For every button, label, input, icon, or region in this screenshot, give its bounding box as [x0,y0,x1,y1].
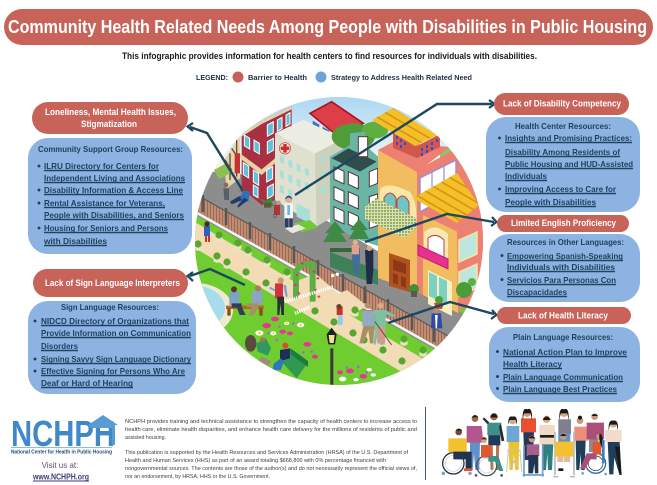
standing person: red top [521,409,536,460]
legend: Barrier to Health [248,73,307,82]
panel: sign language resources: NIDCD Directory of Organizations that [41,317,189,326]
about text: Health and Human Services (HHS) as part of an award totaling $668,800 with 0% percentage financed with [125,458,386,464]
panel: community support group resources: Rental Assistance for Veterans, [44,199,165,208]
couple with child in photo [352,240,373,284]
orange and salmon buildings [330,108,490,316]
standing person: teal top [483,413,504,470]
panel: resources in other languages: Empowering Spanish-Speaking [507,252,623,261]
resident seated on ground [223,183,250,208]
standing person with prosthetic [605,420,622,475]
about text: health care, eliminate health disparities, and enhance health care delivery for the millions of residents of public and [125,427,417,433]
illustration: group of people with disabilities [442,409,622,477]
arrow: loneliness barrier [188,123,243,191]
panel: disability competency barrier: Lack of Disability Competency [503,98,622,108]
panel: resources in other languages: Discapacidades [507,288,567,297]
panel: resources in other languages: Individuals with Disabilities [507,263,615,272]
teal apartment building [330,122,388,247]
panel: sign language resources [28,301,196,394]
panel: resources in other languages [489,234,640,302]
panel: sign language resources: Provide Information on Communication [41,329,191,338]
NCHPH logo: NCHPH [11,413,115,454]
title banner [4,9,653,45]
about text: nongovernmental sources. The contents are those of the author(s) and do not necessarily represent the official views of, [125,466,417,472]
lower bench with two residents [245,335,308,378]
panel: health literacy barrier: Lack of Health Literacy [518,310,609,320]
about text: NCHPH provides training and technical assistance to strengthen the capacity of health centers to increase access to [125,419,417,425]
panel: community support group resources: People with Disabilities, and Seniors [44,211,184,220]
panel: loneliness barrier: Loneliness, Mental Health Issues, [45,107,176,117]
bench conversation [226,277,288,316]
arrow: disability competency barrier [295,100,494,195]
panel: resources in other languages: Resources in Other Languages: [507,238,624,247]
panel: community support group resources: Independent Living and Associations [44,174,185,183]
intro text: This infographic provides information for health centers to find resources for individuals with disabilities. [122,51,537,61]
panel: community support group resources: with Disabilities [43,237,107,246]
wheelchair user: mauve top [523,436,544,477]
legend [196,72,472,82]
street people [204,183,442,385]
lawn [195,216,434,385]
wheelchair user: orange top [475,437,503,477]
legend: LEGEND: [196,73,228,82]
panel: resources in other languages: Servicios Para Personas Con [507,276,616,285]
door [389,253,410,292]
panel: health center resources: People with Disabilities [505,198,596,207]
arched balcony window [365,185,416,238]
resident with cane and companion [336,303,442,345]
panel: sign language resources: Effective Signing for Persons Who Are [41,367,185,376]
panel: community support group resources [28,138,192,254]
panel: sign language resources: Sign Language Resources: [61,303,159,312]
panel: plain language resources: National Action Plan to Improve [503,348,627,357]
panel: sign language resources: Deaf or Hard of Hearing [41,379,133,388]
resident on path [204,221,210,242]
panel: community support group resources: ILRU Directory for Centers for [44,162,160,171]
standing person: gray top [558,409,571,443]
NCHPH logo: National Center for Health in Public Housing [11,450,112,456]
street lamp [327,273,339,385]
fence [198,195,448,348]
panel: health center resources: Public Housing and HUD-Assisted [505,160,633,169]
panel: plain language resources [489,327,640,402]
red brick building [214,106,292,205]
panel: community support group resources: Housing for Seniors and Persons [44,224,168,233]
legend: Strategy to Address Health Related Need [331,73,472,82]
panel: disability competency barrier [494,93,629,115]
flower bed [255,317,318,359]
walking path [195,222,422,372]
wheelchair user: orange top blue wheel [580,433,607,475]
panel: community support group resources: Community Support Group Resources: [38,145,183,154]
website link: www.NCHPH.org [32,472,89,482]
panel: plain language resources: Plain Language Best Practices [503,385,617,394]
palm plant [259,195,274,208]
wheelchair user: yellow shirt [442,429,472,475]
panel: loneliness barrier: Stigmatization [81,119,137,129]
panel: health literacy barrier [497,307,631,324]
panel: sign language resources: Disorders [41,342,78,351]
pine trees [323,219,369,252]
about text: This publication is supported by the Health Resources and Services Administration (HRSA) of the U.S. Department of [125,450,409,456]
shrubs along path [194,231,427,368]
doctor [273,196,293,227]
panel: health center resources: Health Center Resources: [515,122,611,131]
lower flower bed [337,366,376,381]
standing person: cream top [539,416,555,470]
medical building [275,102,363,233]
arrow: limited English barrier [365,214,496,242]
panel: sign language resources: Signing Savvy Sign Language Dictionary [41,355,191,364]
panel: limited English barrier: Limited English Proficiency [511,218,617,228]
arrow: health literacy barrier [388,302,496,323]
panel: plain language resources: Plain Language Communication [503,373,623,382]
panel: health center resources: Insights and Promising Practices: [505,134,632,143]
about text: nor an endorsement, by HRSA, HHS or the U.S. Government. [125,474,270,480]
panel: community support group resources: Disability Information & Access Line [44,186,183,195]
panel: plain language resources: Plain Language Resources: [513,333,613,342]
about text: assisted housing. [125,435,166,441]
about text [125,419,417,480]
website link [32,461,89,482]
arch with flowers [285,260,333,313]
standing person: peach top [574,416,588,470]
wheelchair user: yellow top [553,432,575,477]
panel: plain language resources: Health Literacy [503,360,562,369]
standing person: blue top with walker [507,416,522,472]
standing person: magenta jacket [467,415,483,470]
website link: Visit us at: [42,461,78,470]
central neighborhood illustration [195,97,483,385]
arrow: sign language barrier [188,269,245,285]
panel: limited English barrier [497,215,629,232]
panel: sign language barrier: Lack of Sign Language Interpreters [45,278,180,288]
pond [202,283,233,328]
panel: health center resources: Individuals [505,172,547,181]
standing person: magenta top [587,413,604,452]
panel: loneliness barrier [32,102,188,134]
panel: health center resources: Disability Among Residents of [505,148,620,157]
panel: health center resources: Improving Access to Care for [505,185,617,194]
panel: health center resources [486,117,640,212]
panel: sign language barrier [33,269,188,297]
